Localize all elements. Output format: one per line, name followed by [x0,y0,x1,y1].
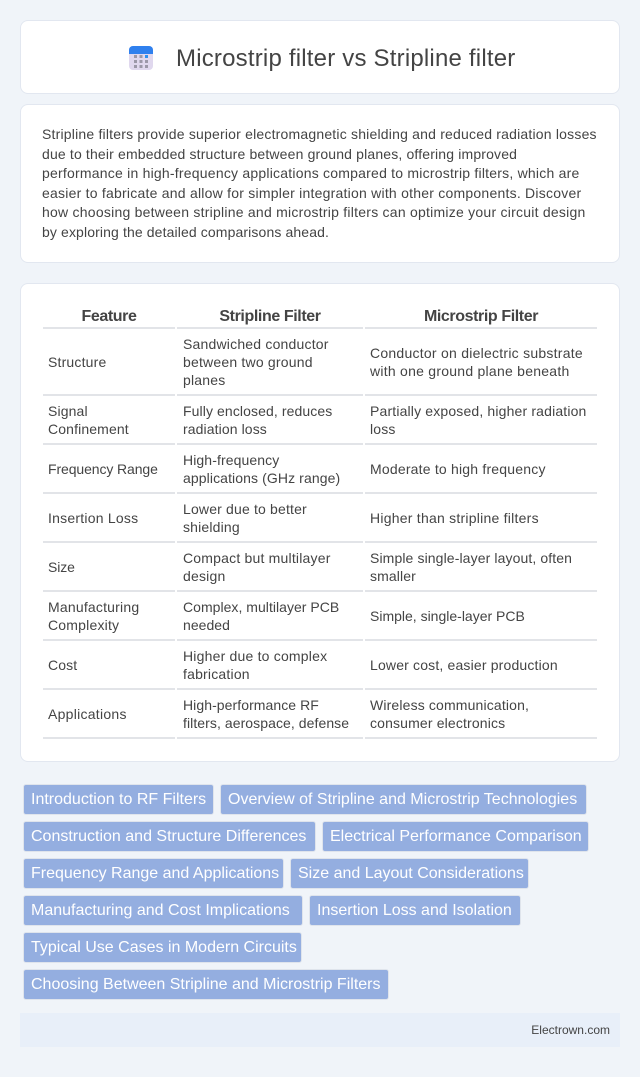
tag: Frequency Range and Applications [31,865,279,882]
tag [23,821,316,852]
row: frequency range: Frequency Range [48,461,158,477]
row: cost: Cost [48,657,77,673]
tag: Construction and Structure Differences [31,828,306,845]
comparison table: consumer electronics [370,715,505,731]
panel: comparison table [20,283,620,762]
comparison table: filters, aerospace, defense [183,715,349,731]
intro paragraph: Stripline filters provide superior electromagnetic shielding and reduced radiation losses [42,126,597,142]
comparison table: Lower cost, easier production [370,657,558,673]
row: size: Size [48,559,75,575]
comparison table: Simple single-layer layout, often [370,550,572,566]
tag: Introduction to RF Filters [31,791,206,808]
row: signal confinement [48,403,129,437]
title: Microstrip filter vs Stripline filter [176,45,515,72]
comparison table: Wireless communication, [370,697,529,713]
comparison table: planes [183,372,225,388]
comparison table: applications (GHz range) [183,470,340,486]
row: structure: Structure [48,354,106,370]
tag [309,895,521,926]
comparison table: design [183,568,225,584]
intro paragraph: by exploring the detailed comparisons ahead. [42,224,329,240]
comparison table: with one ground plane beneath [370,363,570,379]
tag [23,895,303,926]
topic tags [23,784,589,1000]
tag: Electrical Performance Comparison [330,828,582,845]
tag: Size and Layout Considerations [298,865,524,882]
tag: Manufacturing and Cost Implications [31,902,290,919]
tag [322,821,589,852]
panel: intro text [20,104,620,263]
tag [23,784,214,815]
header: stripline: Stripline Filter [219,308,321,325]
comparison table: Complex, multilayer PCB [183,599,339,615]
comparison table: Compact but multilayer [183,550,331,566]
comparison table: between two ground [183,354,313,370]
tag: Choosing Between Stripline and Microstrip Filters [31,976,380,993]
tag: Overview of Stripline and Microstrip Technologies [228,791,577,808]
header panel [20,20,620,94]
tag [23,969,389,1000]
comparison table: Moderate to high frequency [370,461,546,477]
row: applications: Applications [48,706,127,722]
comparison table [43,308,597,739]
footer [20,1013,620,1047]
tag: Insertion Loss and Isolation [317,902,512,919]
comparison table: Partially exposed, higher radiation [370,403,587,419]
intro paragraph: performance in high-frequency applications compared to microstrip filters, which are [42,165,580,181]
row: signal confinement: Confinement [48,421,129,437]
footer: Electrown.com [531,1023,610,1037]
tag [23,932,302,963]
comparison table: fabrication [183,666,250,682]
tag [290,858,529,889]
comparison table: Simple, single-layer PCB [370,608,525,624]
comparison table: Sandwiched conductor [183,336,329,352]
tag [23,858,284,889]
comparison table: loss [370,421,396,437]
row: manufacturing complexity: Complexity [48,617,119,633]
comparison table: shielding [183,519,240,535]
intro paragraph: due to their embedded structure between ground planes, offering improved [42,146,517,162]
intro paragraph: how choosing between stripline and microstrip filters can optimize your circuit design [42,204,586,220]
intro paragraph: easier to fabricate and allow for simpler integration with other components. Discover [42,184,581,200]
row: insertion loss: Insertion Loss [48,510,138,526]
tag: Typical Use Cases in Modern Circuits [31,939,297,956]
comparison table: High-frequency [183,452,279,468]
tag [220,784,587,815]
comparison table: needed [183,617,230,633]
header: microstrip: Microstrip Filter [424,308,538,325]
comparison table: radiation loss [183,421,267,437]
icon: calendar [129,46,153,70]
comparison table: High-performance RF [183,697,319,713]
row: signal confinement: Signal [48,403,88,419]
comparison table: Higher due to complex [183,648,327,664]
comparison table: Fully enclosed, reduces [183,403,332,419]
comparison table: Conductor on dielectric substrate [370,345,583,361]
comparison table: smaller [370,568,416,584]
header: feature: Feature [82,308,136,325]
row: manufacturing complexity [48,599,139,633]
intro paragraph [42,126,597,240]
comparison table: Higher than stripline filters [370,510,539,526]
row: manufacturing complexity: Manufacturing [48,599,139,615]
comparison table: Lower due to better [183,501,307,517]
